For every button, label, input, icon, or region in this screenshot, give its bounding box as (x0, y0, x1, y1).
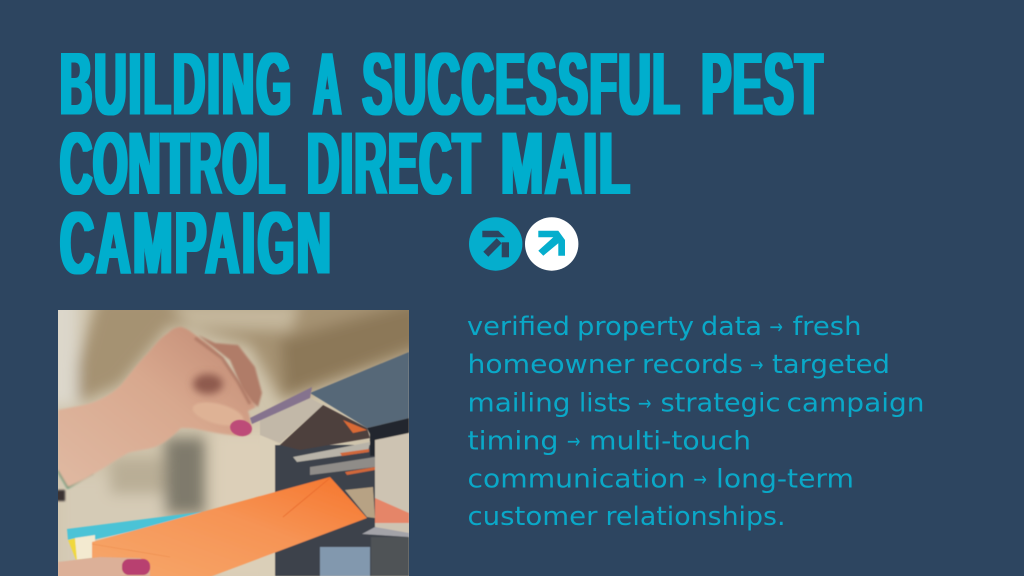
lower nail (122, 559, 150, 575)
body text: homeowner (468, 350, 635, 380)
body text: → (770, 314, 783, 338)
body text: campaign (786, 388, 924, 418)
body text: lists (579, 388, 631, 418)
title: BUILDING (60, 33, 291, 133)
paper corner held in fingers (250, 387, 312, 424)
body text: → (750, 352, 764, 376)
orange envelope (92, 477, 367, 576)
mailbox body (275, 445, 409, 576)
title: CONTROL (60, 113, 285, 213)
body text: → (638, 391, 652, 415)
title: SUCCESSFUL (362, 33, 680, 133)
body text: verified (467, 312, 570, 342)
icon: cyan circle with arrow (469, 217, 522, 271)
mailbox flap (310, 352, 409, 428)
body text: relationships. (606, 502, 786, 532)
fingernail (230, 419, 253, 437)
body text: multi-touch (589, 426, 751, 456)
gap between fingers (193, 374, 223, 394)
thumb highlight (193, 402, 244, 426)
title: A (314, 34, 341, 134)
mailbox post (375, 433, 409, 537)
title: MAIL (501, 114, 630, 214)
body text: → (694, 467, 707, 491)
hand (58, 327, 256, 487)
body text: → (567, 429, 580, 453)
blue and yellow envelopes (67, 512, 210, 540)
middle finger (198, 335, 262, 407)
body text: property (577, 312, 694, 342)
body text: data (701, 312, 762, 342)
lower thumb (58, 557, 150, 576)
body text: strategic (660, 388, 780, 418)
body text: records (642, 350, 743, 380)
body text: mailing (468, 388, 570, 418)
wrist band (58, 470, 93, 487)
body text: long-term (716, 464, 854, 494)
body text: communication (468, 464, 686, 494)
body text: targeted (772, 350, 890, 380)
photo: hand posting orange envelope into mailbox (58, 310, 409, 576)
body text (467, 310, 924, 532)
index finger shade (195, 338, 250, 404)
body text: fresh (792, 312, 862, 342)
title: CAMPAIGN (60, 195, 331, 293)
title (60, 33, 823, 293)
title: PEST (702, 33, 823, 133)
body text: timing (468, 426, 558, 456)
title: DIRECT (307, 113, 480, 213)
icon: white circle with arrow (525, 217, 578, 271)
body text: customer (468, 502, 598, 532)
